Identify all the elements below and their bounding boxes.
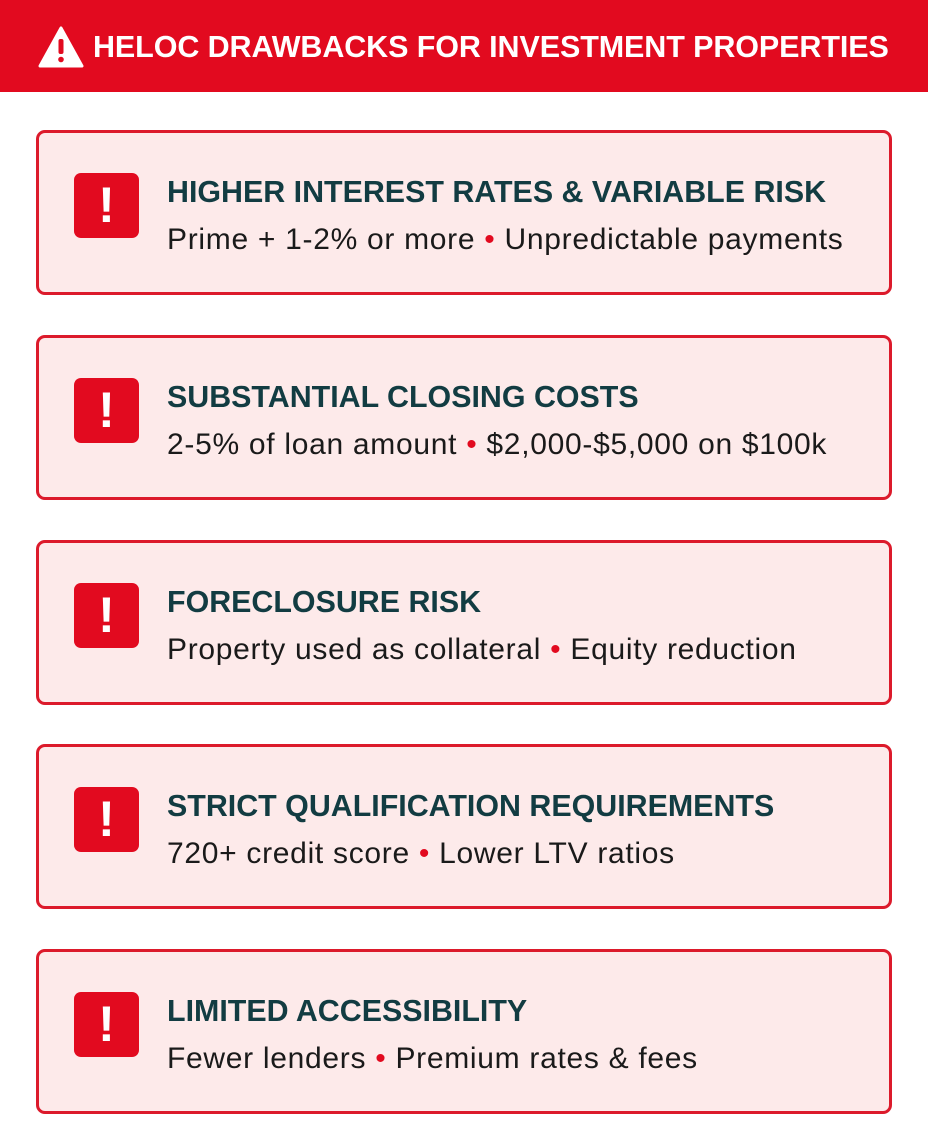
- icon: exclamation: !: [98, 177, 115, 233]
- icon: exclamation: [74, 378, 139, 443]
- text: Property used as collateral • Equity reduction: [167, 633, 797, 666]
- title: HELOC DRAWBACKS FOR INVESTMENT PROPERTIES: [93, 30, 889, 64]
- header banner: [0, 0, 928, 92]
- icon: exclamation: !: [98, 587, 115, 643]
- icon: exclamation: [74, 173, 139, 238]
- text: Fewer lenders • Premium rates & fees: [167, 1042, 698, 1075]
- heading: HIGHER INTEREST RATES & VARIABLE RISK: [167, 175, 826, 209]
- heading: FORECLOSURE RISK: [167, 585, 481, 619]
- text: Prime + 1-2% or more • Unpredictable payments: [167, 223, 843, 256]
- icon: exclamation: !: [98, 382, 115, 438]
- panel: higher interest rates: [36, 130, 892, 295]
- heading: STRICT QUALIFICATION REQUIREMENTS: [167, 789, 774, 823]
- icon: exclamation: !: [98, 791, 115, 847]
- icon: warning triangle: [38, 26, 84, 68]
- heading: SUBSTANTIAL CLOSING COSTS: [167, 380, 639, 414]
- panel: closing costs: [36, 335, 892, 500]
- icon: exclamation: [74, 787, 139, 852]
- text: 2-5% of loan amount • $2,000-$5,000 on $100k: [167, 428, 827, 461]
- panel: qualification requirements: [36, 744, 892, 909]
- panel: limited accessibility: [36, 949, 892, 1114]
- icon: exclamation: [74, 583, 139, 648]
- icon: exclamation: !: [98, 996, 115, 1052]
- icon: exclamation: [74, 992, 139, 1057]
- panel: foreclosure risk: [36, 540, 892, 705]
- text: 720+ credit score • Lower LTV ratios: [167, 837, 675, 870]
- heading: LIMITED ACCESSIBILITY: [167, 994, 527, 1028]
